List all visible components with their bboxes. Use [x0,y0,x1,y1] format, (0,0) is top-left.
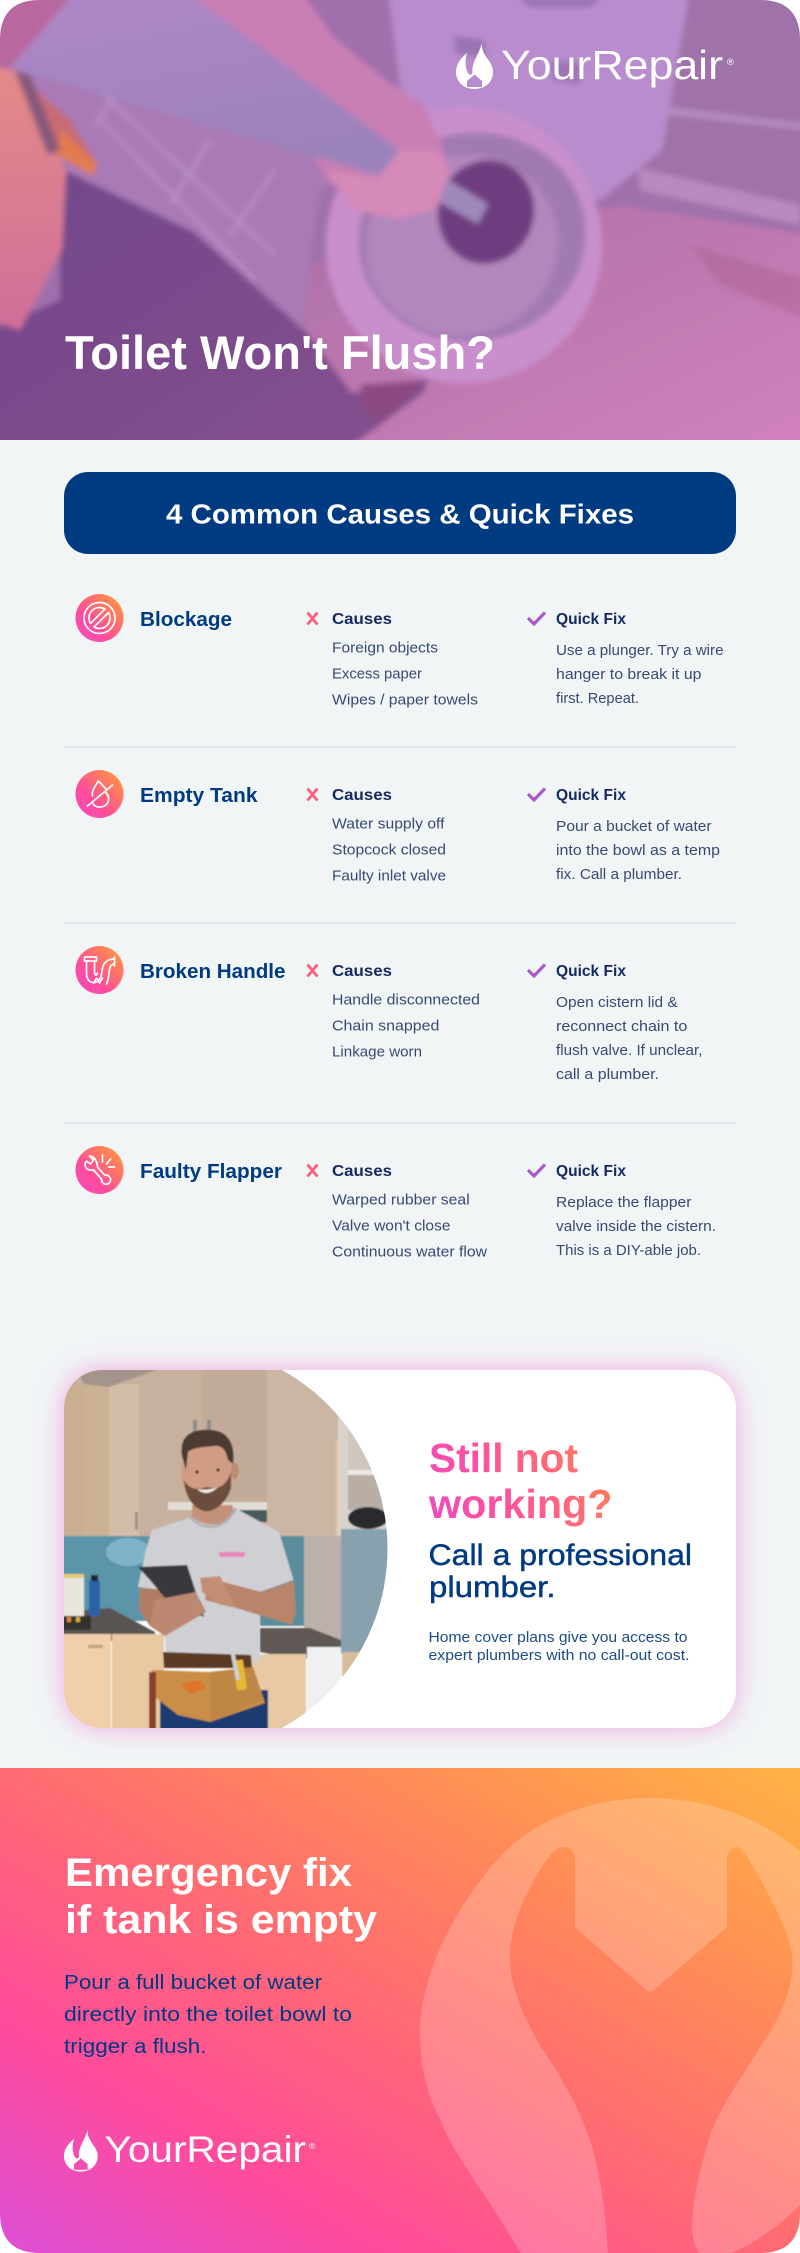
icon: check [528,788,545,800]
quick fix: valve inside the cistern. [556,1219,716,1235]
quick fix: This is a DIY-able job. [556,1243,701,1259]
footer text [64,1971,352,2058]
quick fix: into the bowl as a temp [556,843,720,859]
hero title: Toilet Won't Flush? [65,326,495,379]
quick fix [556,787,720,883]
footer text: trigger a flush. [64,2035,206,2058]
quick fix: Use a plunger. Try a wire [556,643,724,659]
causes list: Foreign objects [332,640,438,656]
quick fix: flush valve. If unclear, [556,1043,702,1059]
causes list: Handle disconnected [332,992,480,1008]
logo: YourRepair: YourRepair [501,42,723,88]
causes list: Wipes / paper towels [332,692,478,708]
callout headline: Still not [429,1435,578,1481]
page background [0,0,800,1768]
callout text [428,1629,690,1664]
icon: wrench with spark [76,1146,124,1194]
icon: check [528,964,545,976]
quick fix [556,963,702,1083]
footer heading [65,1851,378,1942]
causes list [332,611,478,708]
icon: check [528,612,545,624]
row title: Broken Handle [140,960,286,983]
icon: drop with slash [76,770,124,818]
causes list: Causes [332,611,392,628]
causes list: Water supply off [332,816,446,832]
causes list: Warped rubber seal [332,1192,470,1208]
icon: flame with house [456,40,493,89]
row title: Faulty Flapper [140,1160,282,1183]
callout text: expert plumbers with no call-out cost. [428,1647,690,1664]
quick fix: Quick Fix [556,787,626,804]
icon: cross [308,788,318,800]
footer text: Pour a full bucket of water [64,1971,322,1994]
causes list: Causes [332,963,392,980]
causes list: Excess paper [332,666,422,682]
causes list [332,963,480,1060]
icon: large wrench watermark [420,1798,800,2253]
quick fix: Replace the flapper [556,1195,692,1211]
causes list: Chain snapped [332,1018,439,1034]
row title: Empty Tank [140,784,258,807]
quick fix [556,611,724,707]
callout subheading: plumber. [429,1571,556,1604]
quick fix: Open cistern lid & [556,995,678,1011]
section heading bar [64,472,736,554]
quick fix: fix. Call a plumber. [556,867,682,883]
causes list: Stopcock closed [332,842,446,858]
quick fix: Quick Fix [556,963,626,980]
causes list [332,1163,488,1260]
causes list: Faulty inlet valve [332,868,446,884]
icon: cross [308,1164,318,1176]
row: Empty Tank [76,770,720,884]
callout text: Home cover plans give you access to [428,1629,688,1646]
icon: prohibited [76,594,124,642]
icon: pipe trap [76,946,124,994]
logo: YourRepair [456,40,734,89]
quick fix: hanger to break it up [556,667,702,683]
logo: YourRepair: ® [309,2141,316,2151]
callout headline: working? [428,1481,612,1527]
quick fix: first. Repeat. [556,691,639,707]
icon: flame with house [64,2127,98,2172]
icon: cross [308,612,318,624]
causes list: Valve won't close [332,1218,450,1234]
icon: check [528,1164,545,1176]
causes list: Causes [332,787,392,804]
callout subheading: Call a professional [428,1539,692,1572]
row: Faulty Flapper [76,1146,716,1260]
photo: plumber in kitchen [60,1365,395,1730]
logo: YourRepair [64,2127,316,2172]
logo: YourRepair: ® [727,57,734,68]
causes list: Linkage worn [332,1044,422,1060]
hero banner with photo of plunger in toilet [0,0,800,450]
callout subheading [428,1539,692,1604]
quick fix: call a plumber. [556,1067,659,1083]
causes list: Continuous water flow [332,1244,488,1260]
quick fix: reconnect chain to [556,1019,687,1035]
quick fix: Quick Fix [556,611,626,628]
logo: YourRepair: YourRepair [104,2129,306,2170]
causes list [332,787,446,884]
section heading bar: 4 Common Causes & Quick Fixes [166,498,634,530]
quick fix [556,1163,716,1259]
card glow [64,1370,736,1728]
footer text: directly into the toilet bowl to [64,2003,352,2026]
row title: Blockage [140,608,232,631]
row: Blockage [76,594,724,708]
icon: cross [308,964,318,976]
quick fix: Quick Fix [556,1163,626,1180]
row: Broken Handle [76,946,702,1083]
quick fix: Pour a bucket of water [556,819,712,835]
causes list: Causes [332,1163,392,1180]
footer panel: emergency fix [0,1768,800,2253]
footer heading: if tank is empty [65,1898,378,1942]
callout headline [428,1435,612,1527]
callout card: still not working [60,1365,736,1730]
footer heading: Emergency fix [65,1851,352,1895]
